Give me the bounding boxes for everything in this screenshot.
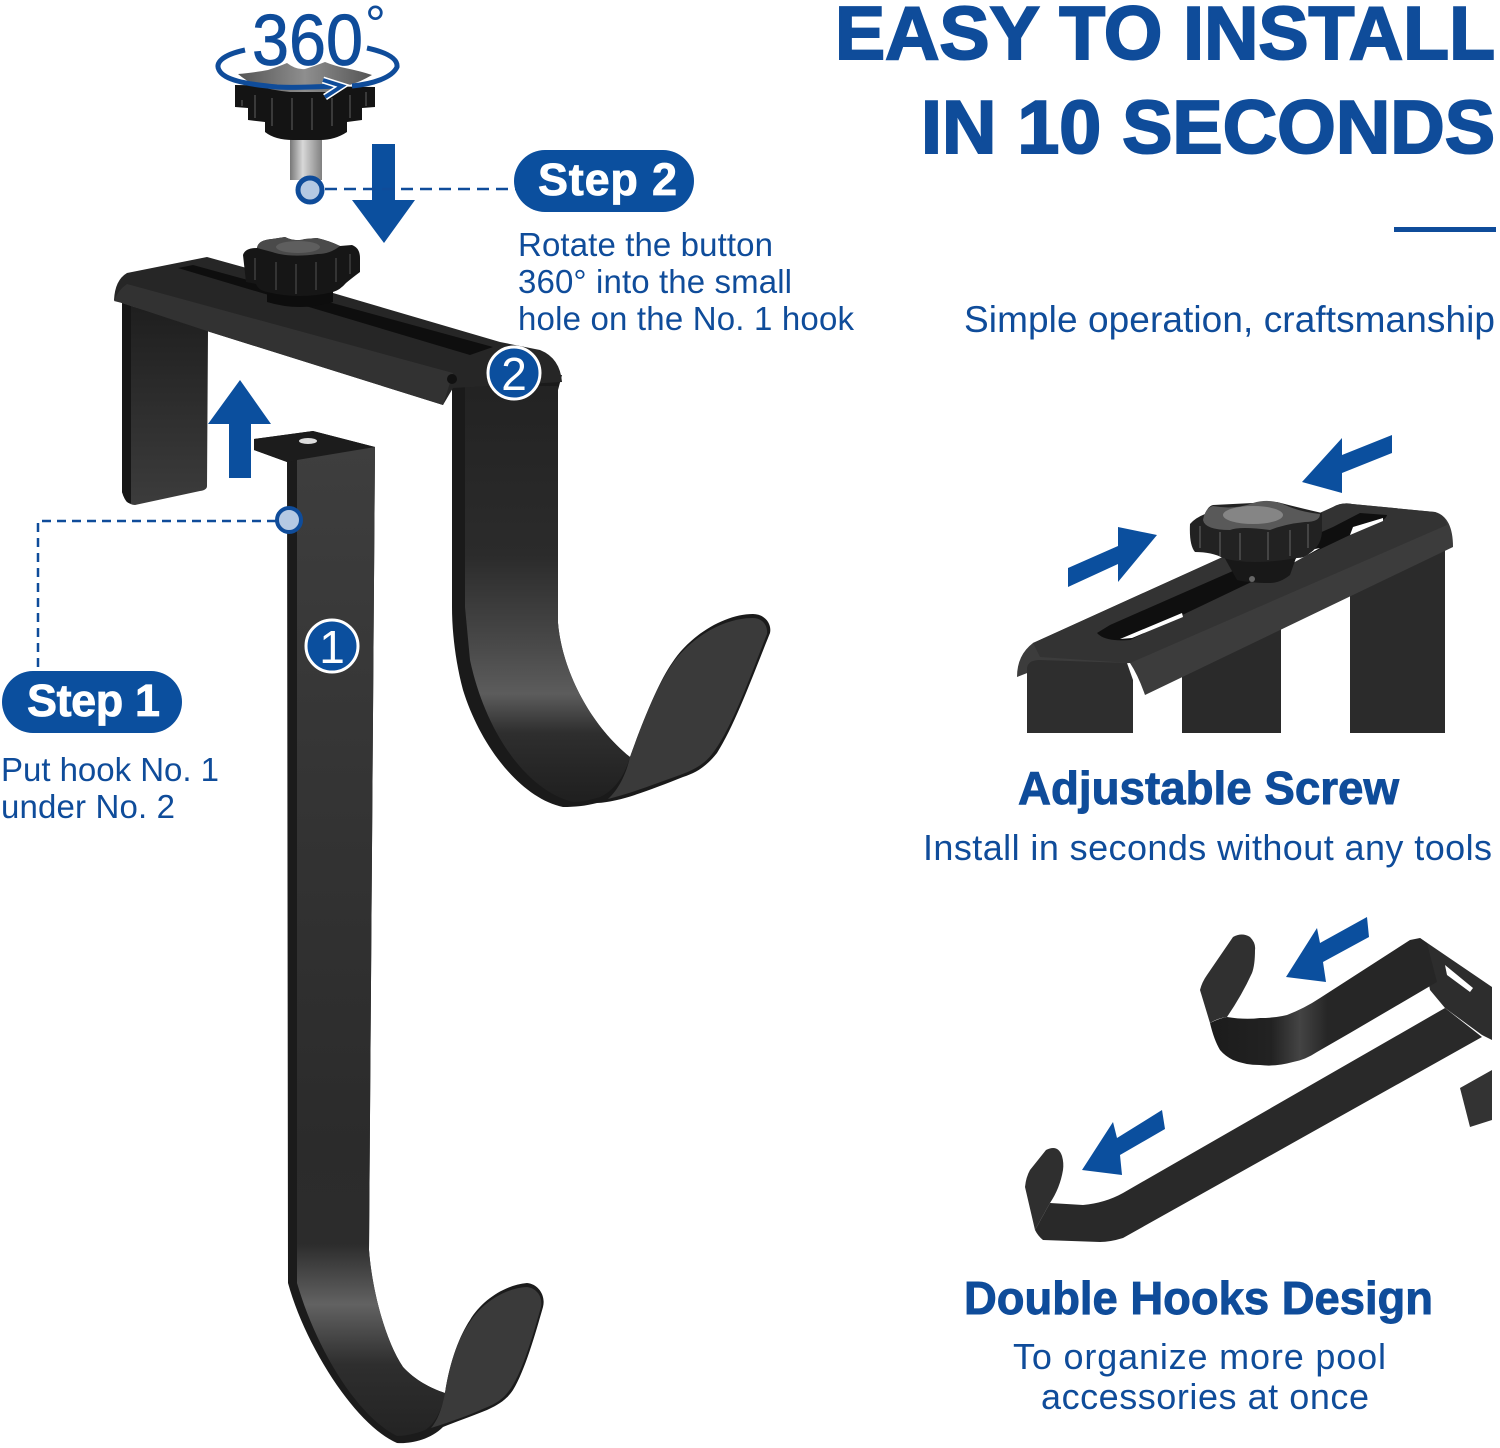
heading: double hooks design: Double Hooks Design	[964, 1272, 1433, 1324]
step 1 description: under No. 2	[1, 788, 175, 825]
step 2 description: 360° into the small	[518, 263, 792, 300]
arrow: lower hook	[1082, 1110, 1165, 1175]
360 degree rotation icon: 360	[252, 1, 363, 81]
accent rule	[1394, 227, 1496, 232]
arrow: upper hook	[1286, 917, 1369, 982]
badge: number 2: 2	[501, 348, 527, 400]
arrow: down	[352, 144, 415, 243]
hook no. 1	[254, 431, 544, 1443]
double hooks description: To organize more pool	[1013, 1336, 1386, 1377]
photo: adjustable screw bracket	[1017, 501, 1453, 733]
step 2 leader line	[298, 178, 516, 202]
step 1 label	[2, 671, 182, 733]
360 degree rotation icon	[218, 0, 397, 97]
badge: number 2	[488, 347, 540, 400]
arrow: left	[1302, 435, 1392, 493]
arrow: up	[208, 380, 271, 478]
hook no. 2	[114, 257, 770, 807]
double hooks description: accessories at once	[1041, 1376, 1369, 1417]
adjustable screw description: Install in seconds without any tools	[923, 827, 1492, 868]
step 1 description: Put hook No. 1	[1, 751, 219, 788]
title	[835, 0, 1495, 169]
knob on hook no. 2	[243, 237, 360, 307]
step 1 label: Step 1	[27, 675, 160, 726]
double hooks description	[1013, 1336, 1386, 1417]
title: IN 10 SECONDS	[921, 85, 1495, 169]
badge: number 1: 1	[319, 621, 345, 673]
step 1 leader line	[38, 508, 301, 671]
step 2 description: hole on the No. 1 hook	[518, 300, 854, 337]
rotating screw knob	[235, 62, 375, 180]
step 1 description	[1, 751, 219, 825]
badge: number 1	[306, 620, 358, 673]
heading: adjustable screw: Adjustable Screw	[1018, 762, 1399, 814]
photo: double hooks	[1025, 934, 1492, 1242]
arrow: right	[1068, 527, 1157, 587]
step 2 description: Rotate the button	[518, 226, 773, 263]
step 2 description	[518, 226, 854, 337]
subtitle: Simple operation, craftsmanship	[964, 299, 1495, 340]
step 2 label	[514, 150, 694, 212]
step 2 label: Step 2	[538, 154, 677, 205]
